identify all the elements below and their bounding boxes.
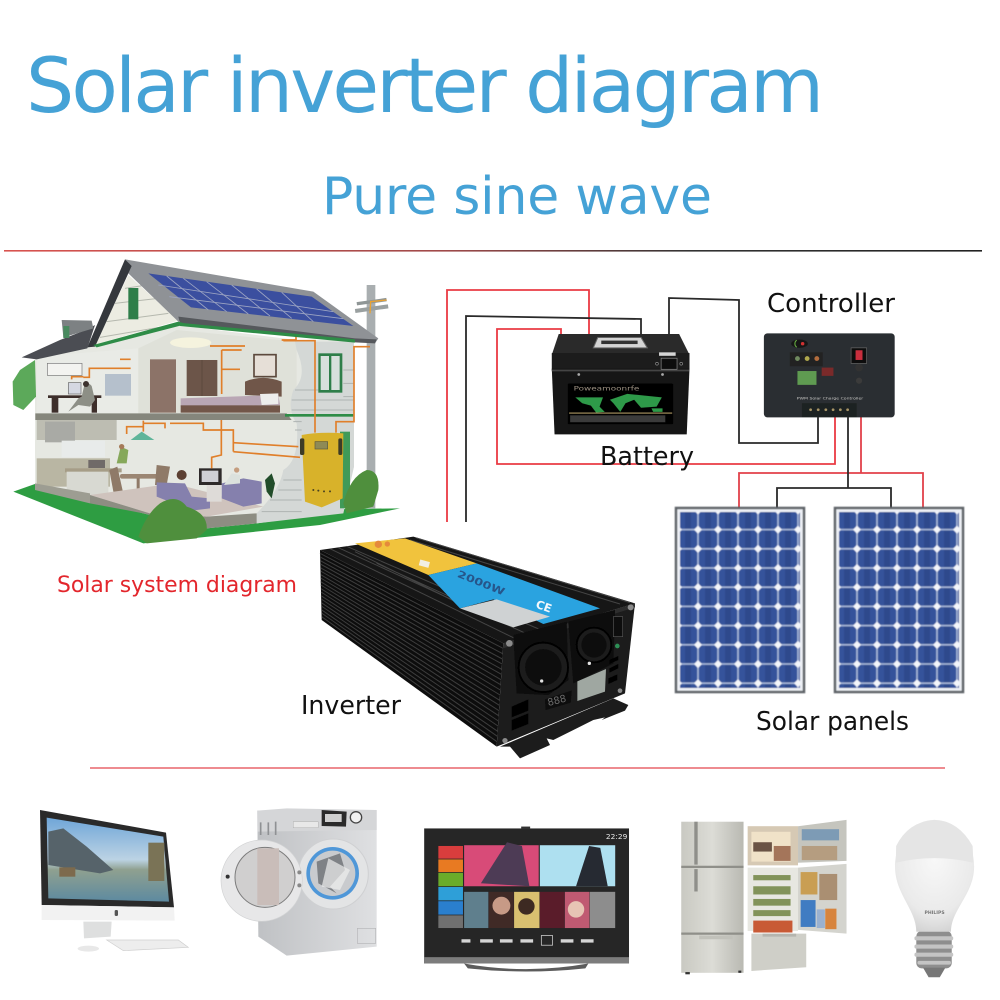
dining set <box>109 432 170 497</box>
battery: Poweamoonrfe <box>574 384 639 392</box>
appliance: light bulb: PHILIPS <box>925 910 945 916</box>
sofas and TV <box>157 467 262 511</box>
appliance: television: 22:29 <box>606 832 628 841</box>
utility pole <box>355 285 388 508</box>
inverter: 888 <box>546 694 568 709</box>
ground <box>13 483 400 543</box>
inverter: 2000W <box>456 569 506 598</box>
socket plates <box>513 610 615 695</box>
mounting foot <box>500 698 628 758</box>
desk and person <box>48 381 101 413</box>
wire: panels negative <box>777 488 891 508</box>
roof and gable <box>22 259 378 359</box>
LCD display <box>577 669 606 701</box>
spec sticker <box>460 599 550 627</box>
picture <box>254 355 276 377</box>
window <box>318 353 342 393</box>
upper floor rooms <box>37 348 138 413</box>
digit display <box>545 691 572 710</box>
wire: panels negative riser <box>847 413 849 488</box>
ceiling lamp <box>170 337 211 348</box>
exterior siding <box>257 342 354 523</box>
label: inverter: Inverter <box>301 691 401 721</box>
floor <box>90 483 263 517</box>
charge controller: PWM Solar Charge Controller <box>797 395 864 400</box>
solar panel left <box>676 508 804 692</box>
label: solar system diagram: Solar system diagram <box>57 573 297 598</box>
side fins <box>320 550 503 747</box>
subtitle: Pure sine wave <box>322 167 712 227</box>
solar array <box>148 273 353 326</box>
wire: battery negative to controller <box>669 298 818 443</box>
inverter: CE <box>534 597 554 616</box>
label: controller: Controller <box>767 289 895 319</box>
appliance: light bulb <box>895 820 974 977</box>
control box <box>300 432 350 508</box>
wire: battery positive to controller <box>497 329 835 464</box>
charge controller <box>764 333 895 417</box>
front panel <box>497 603 635 747</box>
doors <box>150 359 217 413</box>
map on wall <box>105 374 131 396</box>
garden bushes <box>13 360 379 543</box>
battery <box>552 334 690 434</box>
switch <box>613 617 623 637</box>
wire: inverter positive to battery <box>447 290 589 522</box>
wires <box>72 316 370 468</box>
vents <box>512 656 618 731</box>
blue label <box>428 563 600 624</box>
kitchen <box>37 420 128 495</box>
appliance: television <box>424 827 629 972</box>
floor slab <box>35 413 292 420</box>
appliance: desktop computer <box>40 810 188 952</box>
appliance: washing machine <box>221 808 377 956</box>
label: battery: Battery <box>600 442 694 472</box>
wire: inverter negative to battery <box>466 316 641 522</box>
bed <box>181 378 282 413</box>
wiring <box>447 290 923 522</box>
appliance: refrigerator <box>681 820 847 974</box>
label: solar panels: Solar panels <box>756 707 909 737</box>
inverter <box>320 537 635 758</box>
house illustration: solar system <box>13 259 400 543</box>
title: Solar inverter diagram <box>26 41 824 130</box>
battery label <box>568 383 673 424</box>
wire: panels positive <box>739 473 923 508</box>
screws <box>502 604 634 743</box>
yellow label <box>355 538 477 575</box>
wire: panels positive riser <box>860 417 862 473</box>
solar panel right <box>835 508 963 692</box>
connector <box>656 358 683 369</box>
handle <box>593 337 647 348</box>
house walls <box>35 325 354 528</box>
top surface <box>320 537 635 643</box>
air conditioner <box>47 363 82 375</box>
